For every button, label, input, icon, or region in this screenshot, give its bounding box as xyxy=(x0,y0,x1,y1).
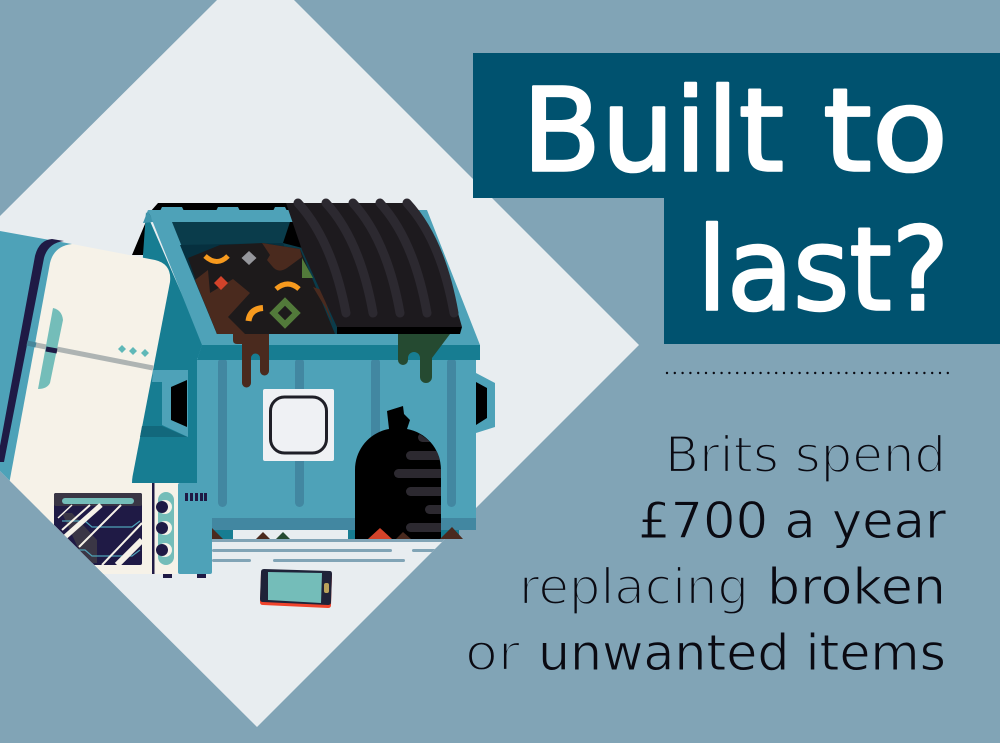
title line 2: last? xyxy=(697,204,949,338)
dumpster right handle xyxy=(476,373,495,433)
dumpster left side xyxy=(132,212,204,483)
fridge indicator dots xyxy=(118,345,149,357)
oven vents xyxy=(185,493,207,501)
ground lines xyxy=(212,539,463,562)
oven controls xyxy=(156,492,174,565)
icon: rubbish bag xyxy=(355,406,441,539)
text line: replacing: replacing xyxy=(519,558,749,616)
illustration: dumpster and discarded items xyxy=(0,203,495,608)
left dumpster handle xyxy=(140,370,197,483)
dumpster interior xyxy=(172,222,350,334)
dumpster label plate xyxy=(263,389,334,461)
green slime drips xyxy=(398,334,450,383)
fridge door seam xyxy=(27,308,153,389)
waste pile xyxy=(188,243,335,334)
text line: or: or xyxy=(465,624,520,682)
oven window xyxy=(54,493,142,565)
dotted divider xyxy=(667,372,949,374)
icon: fridge xyxy=(0,231,170,560)
text line: unwanted items: unwanted items xyxy=(538,624,946,682)
icon: oven xyxy=(40,483,212,578)
text line: broken: broken xyxy=(767,558,946,616)
text line: Brits spend: Brits spend xyxy=(665,426,946,484)
brown slime drips xyxy=(233,334,269,388)
dumpster lid xyxy=(286,203,462,334)
dumpster back rim xyxy=(132,203,292,255)
ground gap and debris xyxy=(212,527,463,539)
title line 1: Built xyxy=(522,64,784,198)
panel: white diamond xyxy=(0,0,639,727)
text line: £700 a year: £700 a year xyxy=(638,492,946,550)
icon: dumpster xyxy=(132,203,495,539)
body text xyxy=(465,426,946,682)
dumpster rim xyxy=(143,210,480,360)
title banner xyxy=(473,53,1000,344)
dumpster front xyxy=(197,358,476,530)
title line 1: to xyxy=(823,64,948,198)
icon: smartphone xyxy=(260,569,332,608)
title background xyxy=(473,53,1000,344)
